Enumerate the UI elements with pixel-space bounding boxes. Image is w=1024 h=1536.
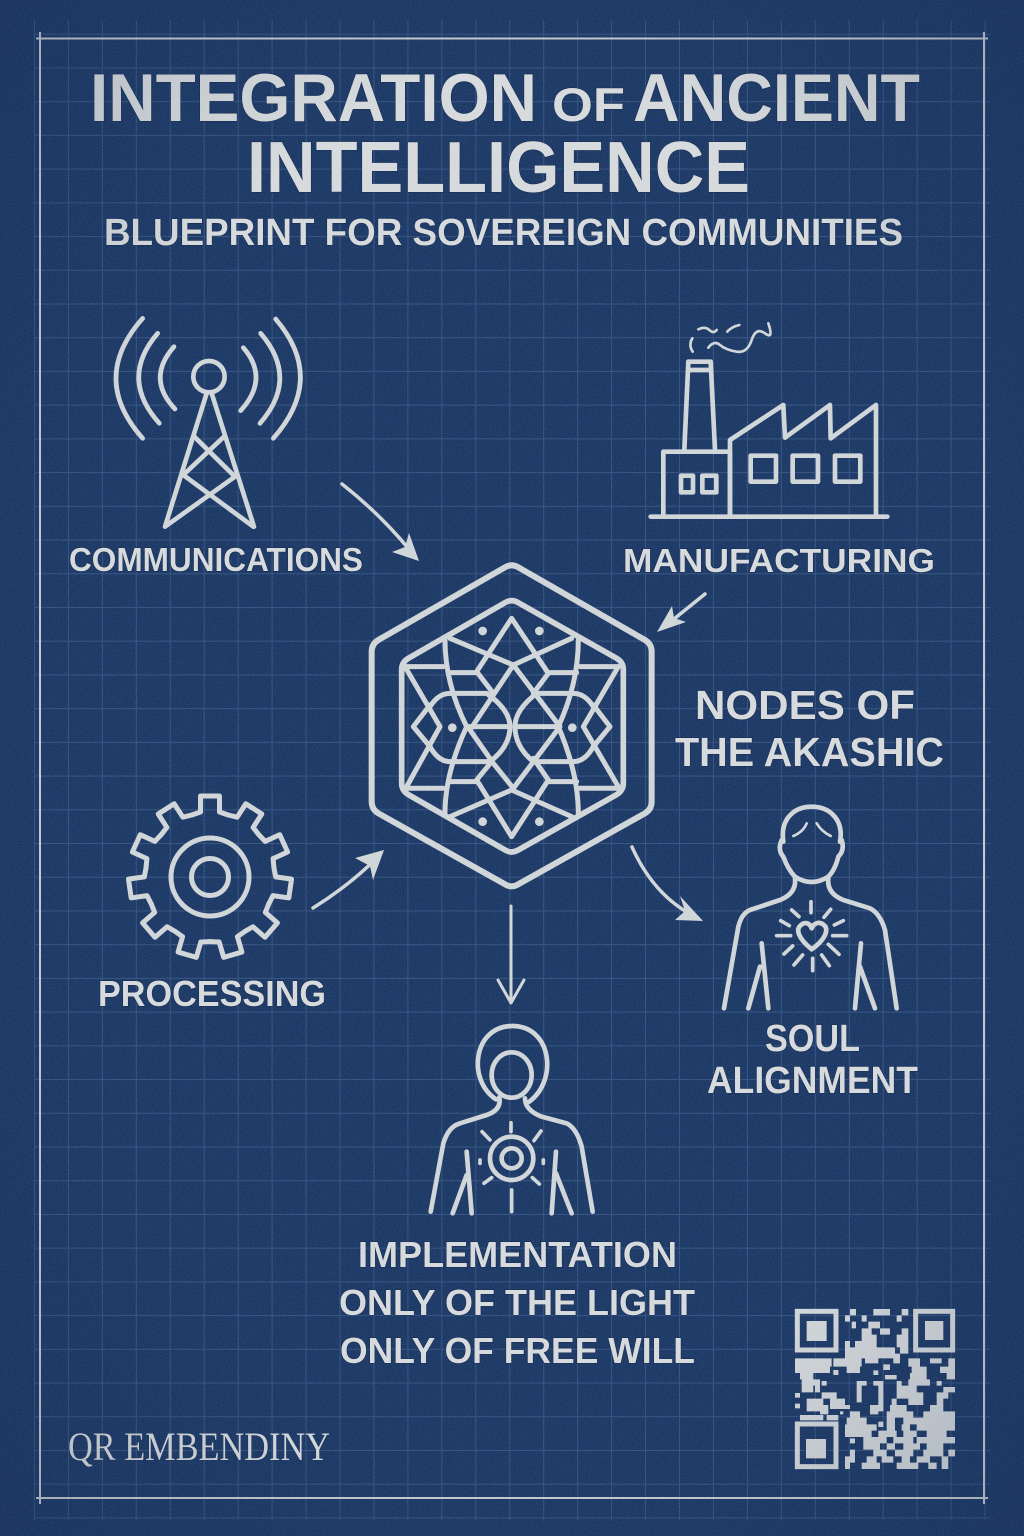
- arrow: node to soul alignment: [632, 847, 703, 921]
- title: [90, 60, 920, 208]
- label: soul alignment: ALIGNMENT: [707, 1060, 918, 1102]
- label: manufacturing: MANUFACTURING: [623, 542, 935, 579]
- label: nodes of the akashic: NODES OF: [695, 682, 915, 728]
- label: implementation: IMPLEMENTATION: [358, 1234, 677, 1275]
- icon: implementation figure: [431, 1026, 593, 1213]
- icon: gear: [127, 796, 293, 960]
- subtitle: BLUEPRINT FOR SOVEREIGN COMMUNITIES: [104, 212, 903, 254]
- arrow: node to implementation: [498, 906, 524, 1003]
- label: nodes of the akashic: THE AKASHIC: [675, 729, 944, 775]
- label: soul alignment: [707, 1018, 918, 1102]
- label: implementation: ONLY OF THE LIGHT: [339, 1282, 695, 1323]
- arrow: manufacturing to node: [657, 594, 705, 632]
- label: processing: PROCESSING: [98, 973, 326, 1014]
- footer label: QR embedding: QR EMBENDINY: [68, 1424, 330, 1469]
- title: INTEGRATION: [90, 60, 537, 136]
- label: nodes of the akashic: [675, 682, 944, 775]
- icon: communications tower: [116, 318, 300, 527]
- icon: central hexagon node: [372, 565, 652, 886]
- title: INTELLIGENCE: [247, 128, 750, 208]
- arrow: communications to node: [342, 484, 419, 561]
- label: implementation: ONLY OF FREE WILL: [340, 1330, 695, 1371]
- label: communications: COMMUNICATIONS: [69, 541, 363, 578]
- title: ANCIENT: [633, 60, 920, 136]
- QR code: [795, 1309, 955, 1469]
- icon: soul alignment figure: [724, 807, 897, 1008]
- label: soul alignment: SOUL: [765, 1018, 860, 1060]
- icon: factory: [651, 323, 887, 517]
- arrow: processing to node: [313, 850, 384, 908]
- title: OF: [552, 78, 625, 131]
- label: implementation: [339, 1234, 695, 1371]
